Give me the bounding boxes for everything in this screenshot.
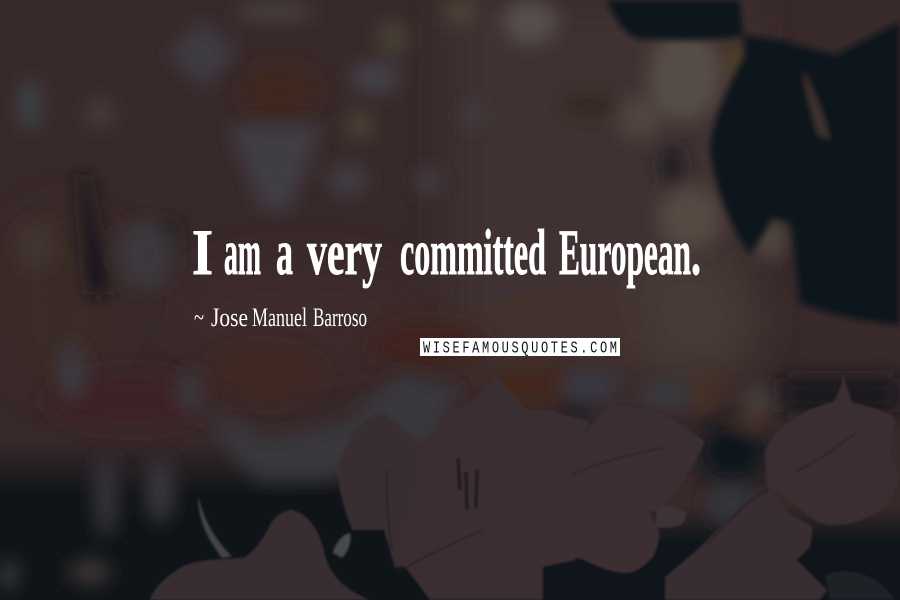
leaf veins bbox=[387, 433, 855, 573]
leaf: bottom right bbox=[665, 490, 827, 600]
leaf: small bract bbox=[655, 506, 687, 528]
quote text: . bbox=[691, 217, 701, 289]
author attribution: Manuel bbox=[252, 303, 307, 332]
flower stamens bbox=[458, 458, 477, 510]
author attribution: Jose bbox=[211, 303, 248, 332]
leaf: far right bbox=[765, 373, 900, 525]
quote text: I bbox=[192, 217, 213, 289]
leaf: sliver petal bbox=[198, 496, 232, 558]
quote text: very bbox=[307, 217, 382, 289]
author attribution: ~ bbox=[194, 303, 204, 332]
source badge: WISEFAMOUSQUOTES.COM bbox=[423, 340, 617, 358]
leaf: upper right of flower bbox=[553, 403, 705, 530]
quote text: am bbox=[224, 217, 261, 289]
leaf: left of flower bbox=[338, 412, 440, 568]
dark lower band left bbox=[0, 440, 560, 600]
flower centre petal bbox=[400, 373, 590, 600]
leaf: lower round petal bbox=[543, 495, 660, 573]
dark leaves top right bbox=[607, 0, 900, 325]
quote text: a bbox=[276, 217, 293, 289]
author attribution: Barroso bbox=[313, 303, 367, 332]
dark lower band right bbox=[540, 505, 900, 600]
quote text: European bbox=[559, 217, 691, 289]
quote text: committed bbox=[400, 217, 546, 289]
small light petal bbox=[333, 533, 351, 558]
dark leaf bottom right bbox=[825, 571, 895, 600]
leaf: bottom left bbox=[150, 510, 370, 600]
flower petals and leaves bbox=[150, 373, 900, 600]
